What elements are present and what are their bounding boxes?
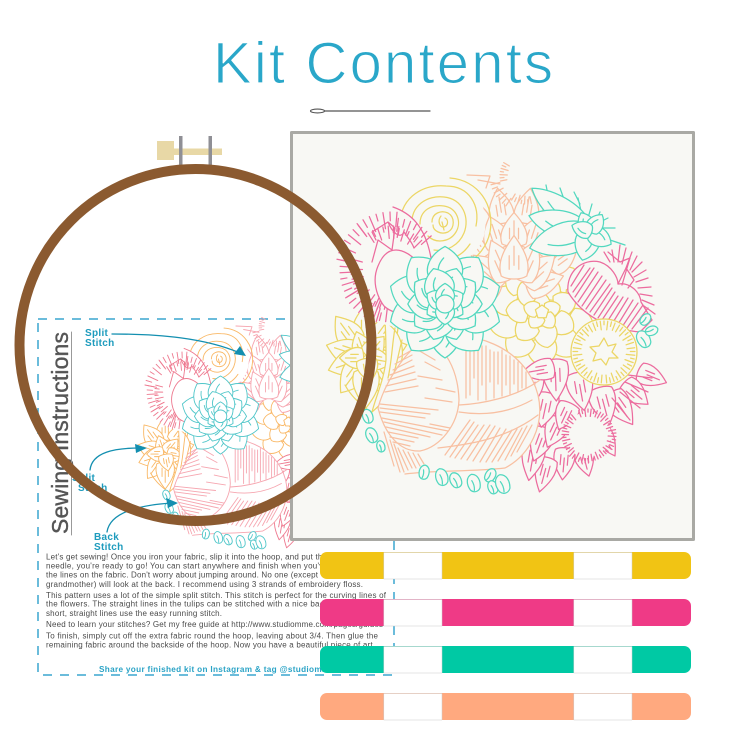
pattern copy <box>135 317 378 550</box>
instruction text <box>46 552 387 650</box>
flower: right pink tulip <box>568 245 655 332</box>
label: split stitch lower: Split <box>72 473 95 484</box>
share line: Share your finished kit on Instagram & tag @studiommeofficial <box>99 665 363 674</box>
thread colour: yellow <box>320 552 691 579</box>
chart: floral pattern on fabric <box>322 162 670 495</box>
flower: central teal succulent <box>385 246 505 361</box>
thread colour: peach <box>320 693 691 720</box>
flower: yellow rose <box>400 178 491 265</box>
instruction text: To finish, simply cut off the extra fabric round the hoop, leaving about 3/4. Then glue the <box>46 632 379 640</box>
instruction text: This pattern uses a lot of the simple split stitch. This stitch is perfect for the curving lines of <box>46 591 387 600</box>
label: back stitch: Stitch <box>94 542 124 553</box>
panel: printed fabric <box>292 132 694 540</box>
thread colour: pink <box>320 599 691 626</box>
flower: small teal upper right <box>524 178 625 264</box>
instruction text: grandmother) will look at the back. I recommend using 3 strands of embroidery floss. <box>46 580 363 589</box>
panel: sewing instructions card <box>38 317 394 675</box>
instruction text: short, straight lines use the easy running stitch. <box>46 609 222 618</box>
label: split stitch lower: Stitch <box>78 483 108 494</box>
vertical heading: Sewing Instructions: Sewing Instructions <box>47 332 73 534</box>
label: back stitch: Back <box>94 532 119 543</box>
instruction text: remaining fabric around the backside of the hoop. Now you have a beautiful piece of art. <box>46 640 375 650</box>
icon: needle <box>310 109 430 113</box>
label: split stitch top: Split <box>85 328 108 339</box>
label: split stitch top: Stitch <box>85 338 115 349</box>
left yellow flower drawn beneath the peach <box>322 304 412 408</box>
arrow: back stitch <box>107 498 178 532</box>
flower: lower right pink protea <box>504 357 670 495</box>
card outline <box>38 319 394 675</box>
instruction text: the flowers. The straight lines in the tulips can be stitched with a nice back <box>46 600 329 608</box>
thread colour: teal <box>320 646 691 673</box>
flower: yellow web centre <box>486 258 598 366</box>
hoop ring <box>20 169 372 521</box>
arrow: split stitch top <box>112 334 246 356</box>
flower: upper-left pink tulip <box>334 207 433 326</box>
instruction text: Need to learn your stitches? Get my free guide at http://www.studiomme.com/pages/guides <box>46 620 383 629</box>
title: Kit Contents <box>213 31 553 96</box>
teal leaf clusters <box>361 312 659 495</box>
instruction text: the lines on the fabric. Don't worry about jumping around. No one (except <box>46 570 319 580</box>
arrow: split stitch lower <box>90 444 147 470</box>
hoop screw <box>157 136 222 168</box>
flower: large peach tulip <box>378 335 540 474</box>
instruction text: needle, you're ready to go! You can start anywhere and finish when you've <box>46 562 329 570</box>
flower: yellow star circle <box>571 319 637 385</box>
embroidery hoop <box>20 136 372 521</box>
instruction text: Let's get sewing! Once you iron your fabric, slip it into the hoop, and put the <box>46 552 328 562</box>
flower: peach protea <box>431 162 597 300</box>
